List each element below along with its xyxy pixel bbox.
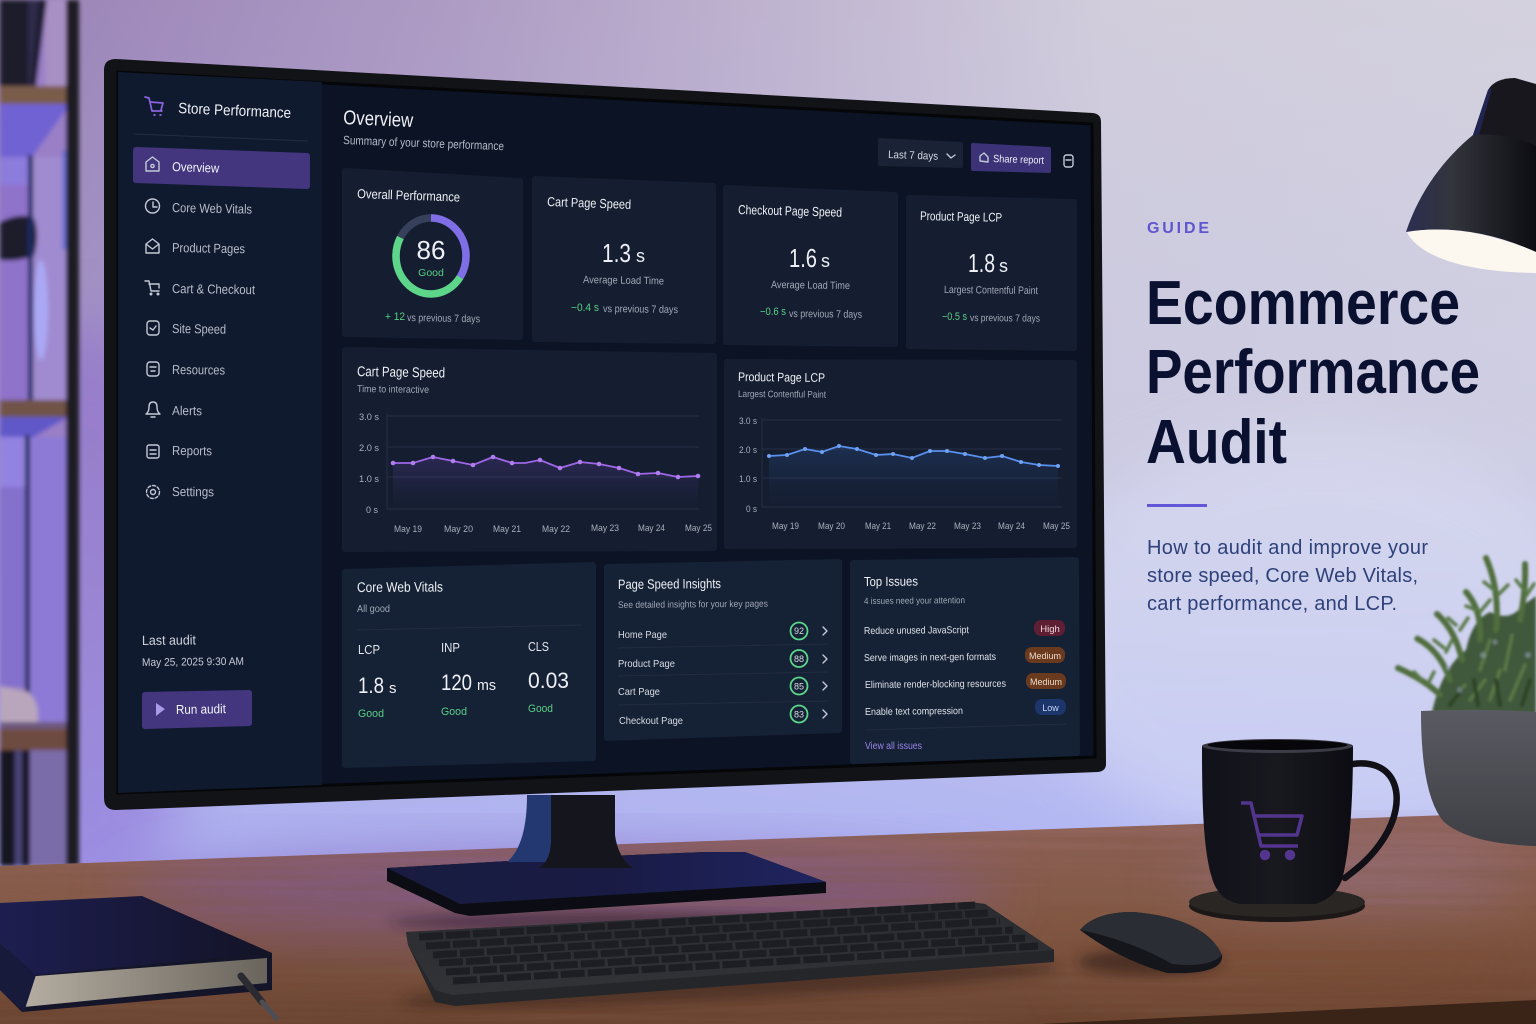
chart panel: cart page speed [345, 350, 714, 549]
desk lamp [1406, 78, 1536, 273]
card: checkout page speed: Checkout Page Speed [738, 202, 842, 220]
x axis labels: May 21 [493, 524, 521, 535]
x axis labels [394, 523, 712, 535]
row: checkout page: 83 [794, 710, 804, 720]
share button: Share report [993, 153, 1044, 167]
nav item: settings [146, 484, 214, 499]
metric: inp [441, 641, 496, 718]
lamp neck [1472, 78, 1536, 146]
heading block [1146, 220, 1480, 615]
issue: render blocking: Medium [1030, 677, 1062, 687]
card: overall performance: Overall Performance [357, 186, 460, 205]
nav item: resources [147, 362, 226, 378]
metric: lcp: LCP [358, 643, 380, 657]
subtitle: store speed, Core Web Vitals, [1147, 565, 1418, 587]
issue: render blocking [865, 673, 1066, 691]
desk [0, 812, 1536, 1024]
card: checkout page speed: 1.6 [789, 243, 817, 273]
subtitle: cart performance, and LCP. [1147, 593, 1397, 615]
card: product page lcp: s [999, 256, 1008, 276]
row: checkout page: Checkout Page [619, 715, 683, 727]
card: overall performance: Good [418, 267, 444, 279]
metric: cls: CLS [528, 640, 549, 654]
screen [118, 72, 1095, 793]
card: checkout page speed [726, 188, 895, 344]
link: view all issues: View all issues [865, 741, 922, 752]
nav item: overview: Overview [172, 159, 220, 176]
nav item: alerts [146, 402, 203, 418]
issue: compression [865, 699, 1066, 718]
chart panel: product page lcp: Product Page LCP [738, 370, 825, 385]
panel: top issues [853, 560, 1077, 761]
metric: lcp: 1.8 [358, 673, 384, 698]
nav item: core web vitals: Core Web Vitals [172, 200, 253, 217]
card: cart page speed: −0.4 s [571, 302, 599, 314]
metric: lcp [358, 643, 396, 720]
metric: cls: Good [528, 703, 553, 715]
header [343, 107, 1073, 171]
issue: render blocking: Eliminate render-blocking resources [865, 679, 1006, 691]
x axis labels: May 23 [954, 521, 981, 532]
nav item: cart and checkout [145, 281, 255, 297]
x axis labels: May 24 [638, 523, 665, 534]
chart panel: cart page speed: Cart Page Speed [357, 363, 445, 381]
row: home page [618, 622, 827, 641]
issue: javascript [864, 620, 1065, 637]
card: cart page speed: 1.3 [602, 238, 631, 268]
title: Ecommerce [1146, 269, 1460, 338]
issue: images: Serve images in next-gen formats [864, 652, 996, 664]
nav item: site speed: Site Speed [172, 321, 226, 337]
potted plant [1398, 558, 1536, 846]
card: overall performance: 86 [417, 235, 445, 265]
nav item: product pages [146, 239, 246, 256]
pen [241, 976, 276, 1018]
monitor [104, 59, 1106, 810]
card: checkout page speed: −0.6 s [760, 306, 786, 318]
metric: inp: Good [441, 706, 467, 718]
issue: images [864, 647, 1065, 664]
nav item: overview [136, 150, 307, 186]
issue: compression: Enable text compression [865, 706, 963, 718]
sidebar [118, 72, 322, 793]
eyebrow: GUIDE [1147, 220, 1209, 237]
nav item: cart and checkout: Cart & Checkout [172, 281, 255, 297]
issue: images: Medium [1029, 651, 1061, 661]
chart panel: cart page speed: Time to interactive [357, 384, 429, 396]
nav item: resources: Resources [172, 362, 226, 378]
row: cart page: 85 [794, 682, 804, 692]
run audit button [145, 693, 249, 726]
chart panel: product page lcp [727, 362, 1074, 546]
card: cart page speed [535, 179, 713, 341]
card: product page lcp: −0.5 s [942, 311, 967, 323]
nav item: settings: Settings [172, 484, 214, 499]
row: product page: Product Page [618, 658, 675, 670]
shelf unit [0, 0, 79, 866]
y axis labels: 0 s [746, 504, 757, 515]
x axis labels: May 22 [542, 524, 570, 535]
nav item: alerts: Alerts [172, 403, 203, 418]
x axis labels: May 20 [818, 521, 845, 532]
x axis labels: May 21 [865, 521, 891, 532]
title: Performance [1146, 338, 1480, 407]
keyboard [400, 902, 1060, 1016]
panel: core web vitals [345, 565, 593, 765]
card: cart page speed: vs previous 7 days [603, 303, 678, 316]
card: product page lcp: 1.8 [968, 248, 995, 278]
issue: javascript: High [1040, 624, 1060, 635]
row: checkout page [619, 706, 827, 727]
card: cart page speed: Average Load Time [583, 274, 664, 287]
card: product page lcp [909, 198, 1074, 348]
issue: javascript: Reduce unused JavaScript [864, 625, 969, 637]
last audit: Last audit [142, 632, 196, 648]
x axis labels: May 24 [998, 521, 1025, 532]
x axis labels: May 19 [772, 521, 799, 532]
card: overall performance: vs previous 7 days [407, 312, 480, 325]
y axis labels: 3.0 s [359, 412, 379, 423]
icon: brand cart [145, 97, 163, 115]
x axis labels: May 22 [909, 521, 936, 532]
y axis labels: 1.0 s [359, 474, 379, 485]
nav item: site speed [147, 321, 226, 337]
metric: inp: ms [477, 677, 496, 694]
lamp light [1407, 230, 1536, 273]
card: overall performance: + 12 [385, 311, 405, 323]
last audit: May 25, 2025 9:30 AM [142, 656, 244, 669]
bezel [104, 59, 1106, 810]
date range select: Last 7 days [888, 149, 939, 163]
coaster [1189, 887, 1365, 922]
nav item: core web vitals [146, 199, 253, 217]
row: home page: 92 [794, 626, 804, 636]
line chart: product lcp [767, 444, 1060, 507]
x axis labels: May 25 [685, 523, 712, 534]
subtitle [1147, 537, 1428, 615]
notebook and pen [0, 896, 276, 1018]
wood grain [161, 816, 1490, 922]
nav item: reports: Reports [172, 443, 213, 458]
x axis labels: May 20 [444, 524, 473, 535]
y axis labels: 2.0 s [359, 443, 379, 454]
card: checkout page speed: s [821, 251, 830, 271]
card: overall performance [345, 171, 520, 337]
card: product page lcp: vs previous 7 days [970, 313, 1040, 325]
header: Summary of your store performance [343, 133, 505, 153]
row: home page: Home Page [618, 629, 667, 641]
issue: compression: Low [1042, 703, 1059, 713]
y axis labels [359, 412, 379, 516]
y axis labels: 0 s [366, 505, 378, 516]
card: checkout page speed: vs previous 7 days [789, 308, 862, 321]
icon: cart logo [1241, 803, 1302, 858]
lamp shade [1406, 134, 1536, 252]
row: product page: 88 [794, 654, 804, 664]
icon: clipboard [1064, 155, 1073, 167]
coffee mug on coaster [1189, 739, 1397, 922]
x axis labels: May 19 [394, 524, 422, 535]
date range select [880, 140, 961, 166]
line chart: cart speed [391, 455, 700, 509]
share button [973, 145, 1049, 171]
chart panel: product page lcp: Largest Contentful Paint [738, 389, 826, 401]
row: product page [618, 650, 827, 670]
panel: top issues: Top Issues [864, 574, 918, 589]
panel: core web vitals: Core Web Vitals [357, 579, 443, 595]
header: Overview [343, 107, 414, 132]
row: cart page [618, 678, 827, 698]
panel: top issues: 4 issues need your attention [864, 595, 965, 606]
x axis labels: May 25 [1043, 521, 1070, 532]
subtitle: How to audit and improve your [1147, 537, 1428, 559]
metric: lcp: Good [358, 708, 384, 720]
metric: inp: 120 [441, 670, 472, 695]
last audit [142, 632, 244, 669]
card: product page lcp: Largest Contentful Paint [944, 284, 1038, 297]
title: Audit [1146, 408, 1287, 477]
card: cart page speed: s [636, 246, 645, 266]
metric: lcp: s [389, 680, 396, 697]
metric: cls [528, 640, 569, 715]
panel: page speed insights: Page Speed Insights [618, 576, 721, 592]
title [1146, 269, 1480, 477]
x axis labels: May 23 [591, 523, 619, 534]
card: checkout page speed: Average Load Time [771, 279, 850, 292]
computer mouse [1078, 912, 1222, 975]
panel: page speed insights [607, 562, 839, 738]
row: cart page: Cart Page [618, 686, 660, 698]
nav item: reports [147, 443, 213, 458]
y axis labels [739, 416, 757, 515]
metric: inp: INP [441, 641, 460, 655]
y axis labels: 1.0 s [739, 474, 757, 485]
panel: page speed insights: See detailed insights for your key pages [618, 599, 768, 611]
x axis labels [772, 521, 1070, 532]
y axis labels: 2.0 s [739, 445, 757, 456]
card: cart page speed: Cart Page Speed [547, 194, 631, 212]
card: product page lcp: Product Page LCP [920, 209, 1002, 225]
monitor stand [387, 795, 830, 932]
nav item: product pages: Product Pages [172, 240, 246, 256]
metric: cls: 0.03 [528, 668, 569, 693]
run audit button: Run audit [176, 701, 226, 717]
y axis labels: 3.0 s [739, 416, 757, 427]
score ring [396, 218, 466, 294]
panel: core web vitals: All good [357, 604, 390, 615]
brand name: Store Performance [178, 100, 291, 122]
